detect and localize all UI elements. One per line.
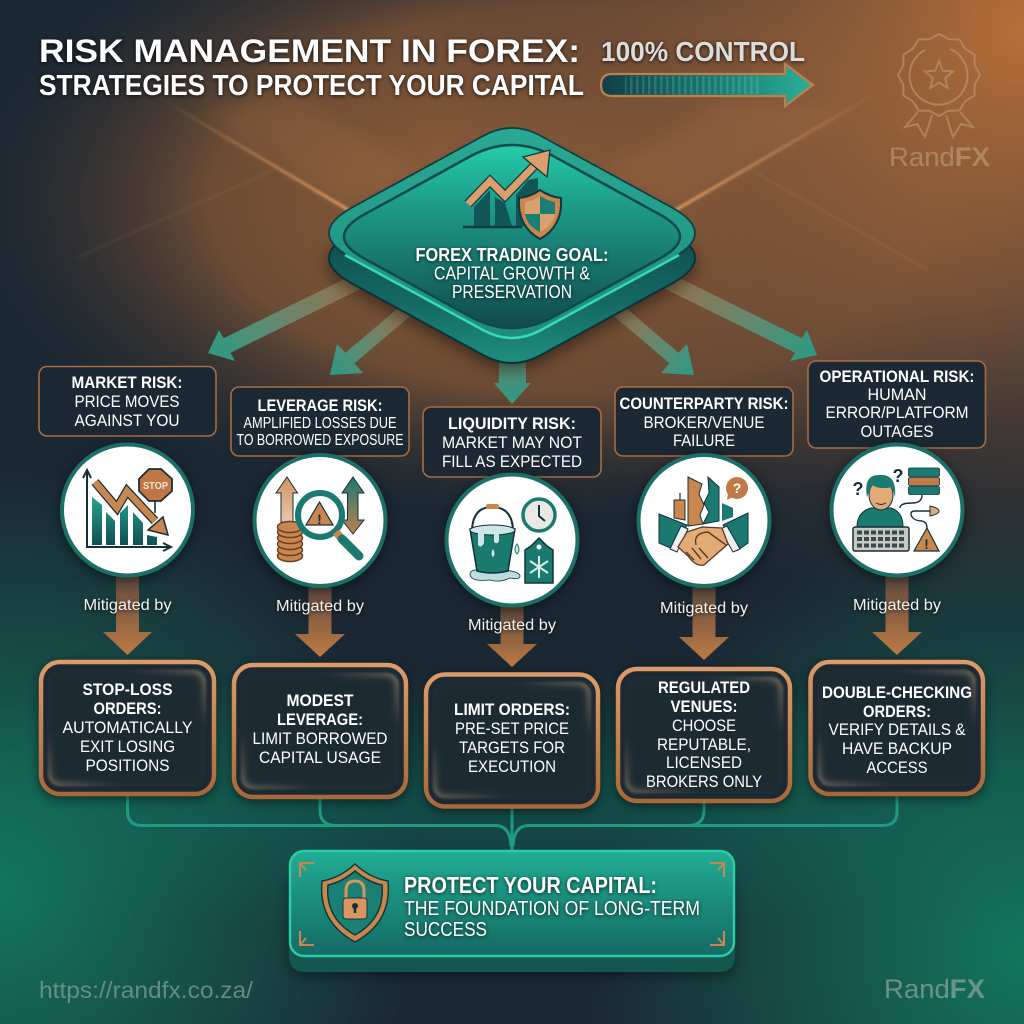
panel: counterparty risk: [615, 387, 793, 456]
panel: double-checking orders: HAVE BACKUP: [842, 739, 952, 758]
panel: limit orders: [426, 674, 598, 806]
panel: market risk: AGAINST YOU: [74, 411, 180, 430]
panel: double-checking orders: VERIFY DETAILS &: [828, 720, 966, 739]
icon: leverage risk circle: !: [317, 511, 322, 527]
arrow to market risk: [208, 267, 376, 361]
mitigated by labels: Mitigated by: [660, 600, 748, 617]
goal text: CAPITAL GROWTH &: [434, 264, 590, 284]
panel: counterparty risk: COUNTERPARTY RISK:: [620, 394, 788, 413]
corner marks: [300, 863, 724, 945]
panel: stop-loss orders: STOP-LOSS: [82, 680, 172, 699]
panel: stop-loss orders: EXIT LOSING: [80, 737, 175, 756]
arrow: market mitigation: [103, 575, 152, 655]
panel: stop-loss orders: AUTOMATICALLY: [62, 718, 192, 737]
icon: shield with padlock: [322, 864, 388, 942]
panel: liquidity risk: LIQUIDITY RISK:: [448, 414, 576, 433]
icon: liquidity risk circle: [446, 474, 578, 606]
call-to-action text: SUCCESS: [404, 919, 487, 941]
panel: market risk: [39, 366, 216, 436]
panel: limit orders: TARGETS FOR: [459, 738, 565, 757]
panel: modest leverage: LEVERAGE:: [277, 710, 363, 729]
panel: limit orders: LIMIT ORDERS:: [454, 700, 570, 719]
mitigated by labels: Mitigated by: [84, 597, 172, 614]
panel: regulated venues: REPUTABLE,: [657, 735, 751, 754]
progress arrow: [601, 64, 813, 106]
panel: liquidity risk: FILL AS EXPECTED: [442, 452, 582, 471]
panel: double-checking orders: ORDERS:: [863, 702, 931, 721]
panel: regulated venues: LICENSED: [666, 753, 742, 772]
goal text: FOREX TRADING GOAL:: [416, 245, 608, 265]
website url: https://randfx.co.za/: [39, 977, 254, 1003]
panel: operational risk: HUMAN: [868, 385, 926, 404]
icon: counterparty risk circle: ?: [733, 480, 741, 496]
goal text: [416, 245, 608, 302]
arrow: counterparty mitigation: [679, 585, 729, 660]
panel: leverage risk: LEVERAGE RISK:: [258, 396, 382, 415]
panel: stop-loss orders: [41, 662, 214, 794]
100% control label: 100% CONTROL: [601, 36, 805, 67]
panel: leverage risk: [231, 387, 409, 456]
panel: double-checking orders: ACCESS: [866, 758, 928, 777]
panel: limit orders: EXECUTION: [468, 757, 556, 776]
panel: market risk: PRICE MOVES: [74, 392, 180, 411]
arrow: liquidity mitigation: [487, 605, 537, 667]
logo wordmark bottom right: RandFX: [884, 974, 985, 1004]
logo badge top right: [898, 34, 980, 137]
icon: operational risk circle: !: [924, 536, 929, 552]
arrow: leverage mitigation: [295, 585, 345, 657]
call-to-action text: THE FOUNDATION OF LONG-TERM: [404, 898, 700, 920]
icon: operational risk circle: ?: [852, 479, 864, 499]
panel: counterparty risk: FAILURE: [673, 431, 735, 450]
title: [39, 33, 584, 102]
panel: stop-loss orders: POSITIONS: [86, 756, 170, 775]
panel: stop-loss orders: ORDERS:: [94, 699, 162, 718]
icon: leverage risk circle: [254, 455, 386, 586]
arrow to counterparty risk: [604, 297, 694, 375]
panel: protect your capital: [289, 851, 735, 972]
panel: regulated venues: REGULATED: [658, 678, 750, 697]
icon: growth chart and shield: [463, 150, 561, 239]
arrow to operational risk: [650, 267, 817, 361]
icon: operational risk circle: [832, 444, 962, 576]
title: RISK MANAGEMENT IN FOREX:: [39, 33, 580, 69]
panel: modest leverage: LIMIT BORROWED: [252, 729, 388, 748]
arrow to leverage risk: [330, 297, 420, 375]
mitigated by labels: Mitigated by: [276, 598, 364, 615]
panel: liquidity risk: [423, 407, 601, 477]
logo wordmark top right: RandFX: [889, 142, 990, 172]
panel: regulated venues: CHOOSE: [672, 716, 736, 735]
panel: operational risk: ERROR/PLATFORM: [826, 403, 968, 422]
central goal diamond: [329, 128, 695, 363]
panel: double-checking orders: DOUBLE-CHECKING: [822, 683, 972, 702]
panel: leverage risk: TO BORROWED EXPOSURE: [236, 432, 404, 449]
panel: regulated venues: [618, 669, 790, 801]
arrow to liquidity risk: [494, 350, 531, 404]
connector lines: [128, 796, 897, 851]
panel: double-checking orders: [810, 662, 983, 794]
mitigated by labels: [84, 597, 941, 634]
icon: market risk circle: STOP: [143, 481, 168, 492]
goal text: PRESERVATION: [452, 282, 572, 302]
panel: operational risk: OUTAGES: [860, 422, 934, 441]
panel: regulated venues: BROKERS ONLY: [646, 772, 762, 791]
panel: market risk: MARKET RISK:: [72, 373, 182, 392]
panel: modest leverage: [234, 665, 406, 797]
icon: market risk circle: [62, 444, 193, 576]
panel: modest leverage: CAPITAL USAGE: [259, 748, 381, 767]
icon: operational risk circle: ?: [892, 466, 904, 486]
panel: operational risk: [808, 361, 986, 448]
mitigated by labels: Mitigated by: [853, 597, 941, 614]
call-to-action text: PROTECT YOUR CAPITAL:: [404, 872, 657, 898]
panel: counterparty risk: BROKER/VENUE: [644, 413, 764, 432]
call-to-action text: [404, 872, 700, 941]
mitigated by labels: Mitigated by: [468, 617, 556, 634]
panel: modest leverage: MODEST: [286, 691, 354, 710]
panel: leverage risk: AMPLIFIED LOSSES DUE: [244, 415, 396, 432]
title: STRATEGIES TO PROTECT YOUR CAPITAL: [39, 70, 584, 102]
panel: limit orders: PRE-SET PRICE: [455, 719, 569, 738]
icon: counterparty risk circle: [638, 455, 770, 586]
arrow: operational mitigation: [872, 575, 922, 655]
panel: regulated venues: VENUES:: [670, 697, 738, 716]
panel: liquidity risk: MARKET MAY NOT: [442, 433, 582, 452]
panel: operational risk: OPERATIONAL RISK:: [820, 367, 974, 386]
